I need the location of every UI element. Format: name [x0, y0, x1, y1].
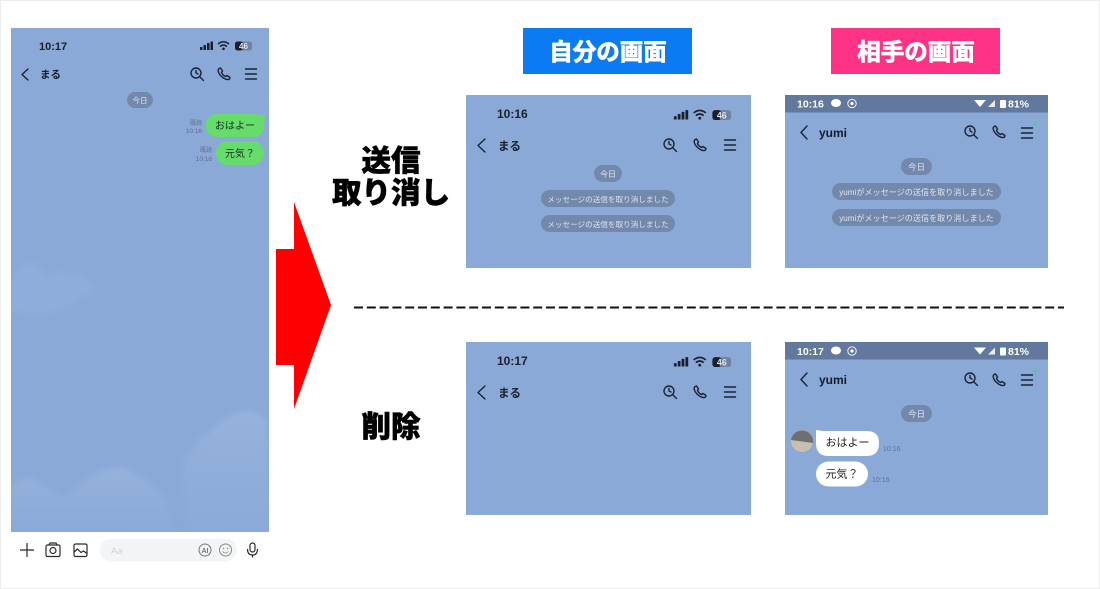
chat header: まる	[498, 140, 521, 153]
panel: my screen, unsend	[466, 95, 751, 268]
icon: microphone	[248, 543, 258, 558]
chat header	[478, 139, 736, 153]
notice: unsent message 2: yumiがメッセージの送信を取り消しました	[839, 213, 994, 223]
panel: original chat screen before action	[11, 28, 269, 532]
sent message: 元気？: 10:16	[196, 156, 212, 163]
status bar	[497, 107, 731, 121]
received message: 元気？	[816, 462, 890, 486]
android status bar: 81%	[1008, 346, 1030, 358]
heading: 自分の画面: 自分の画面	[549, 39, 667, 65]
row label: 送信取り消し: 送信	[361, 145, 421, 178]
input toolbar	[20, 538, 258, 562]
heading: 相手の画面: 相手の画面	[857, 39, 975, 65]
date pill: 今日	[600, 169, 616, 179]
message input field: Aa	[111, 546, 123, 557]
sent message: 元気？: 元気？	[225, 147, 255, 160]
notice: unsent message 2: メッセージの送信を取り消しました	[547, 219, 669, 229]
notice: unsent message 2	[541, 215, 675, 232]
date pill	[127, 92, 153, 108]
date pill	[594, 165, 622, 182]
notice: unsent message 1: yumiがメッセージの送信を取り消しました	[839, 187, 994, 197]
chat header: yumi	[819, 373, 847, 387]
date pill: 今日	[132, 95, 148, 105]
chat header	[801, 122, 1037, 140]
panel: my screen, delete	[466, 342, 751, 515]
sent message: おはよー: おはよー	[215, 120, 255, 132]
row label: 送信取り消し	[332, 145, 450, 210]
chat header	[801, 369, 1037, 387]
arrow: red right arrow	[276, 202, 331, 409]
message input field: AI	[202, 548, 209, 555]
date pill	[901, 158, 932, 175]
message input field	[100, 538, 237, 562]
avatar	[791, 430, 813, 452]
chat header: まる	[498, 387, 521, 400]
android status bar: 10:16	[797, 98, 824, 110]
status bar: 10:16	[497, 107, 528, 121]
received message: おはよー	[816, 430, 901, 456]
chat header	[478, 386, 736, 400]
row label: 送信取り消し: 取り消し	[332, 177, 450, 210]
received message: おはよー: おはよー	[826, 436, 870, 449]
android status bar	[785, 342, 1048, 360]
divider: dashed line	[354, 306, 1064, 308]
heading: 相手の画面	[831, 28, 1000, 74]
sent message: 元気？	[196, 141, 264, 165]
date pill: 今日	[908, 409, 925, 419]
android status bar	[785, 95, 1048, 112]
received message: おはよー: 10:16	[883, 446, 901, 453]
sky clouds background	[18, 412, 266, 488]
icon: plus	[20, 543, 34, 557]
chat header: まる: まる	[40, 69, 61, 81]
status bar	[497, 354, 731, 368]
icon: image	[74, 544, 87, 556]
status bar: 10:17	[497, 354, 528, 368]
notice: unsent message 2	[832, 209, 1001, 226]
status bar	[39, 41, 252, 53]
sent message: おはよー	[186, 114, 266, 137]
chat header: yumi	[819, 126, 847, 140]
notice: unsent message 1	[832, 183, 1001, 200]
status bar: 10:17	[39, 41, 67, 53]
received message: 元気？: 元気？	[826, 466, 858, 480]
android status bar: 10:17	[797, 346, 824, 358]
sent message: おはよー: 10:16	[186, 128, 202, 135]
panel: other party's screen, unsend	[785, 95, 1048, 268]
panel: other party's screen, delete	[785, 342, 1048, 515]
chat header: まる	[22, 68, 256, 81]
received message: 元気？: 10:16	[872, 477, 890, 484]
heading: 自分の画面	[523, 28, 692, 74]
date pill	[901, 405, 932, 422]
notice: unsent message 1: メッセージの送信を取り消しました	[547, 194, 669, 204]
android status bar: 81%	[1008, 98, 1030, 110]
row label: 削除: 削除	[361, 411, 421, 444]
sent message: 元気？: 既読	[200, 146, 212, 154]
sent message: おはよー: 既読	[190, 119, 202, 127]
notice: unsent message 1	[541, 190, 675, 207]
icon: camera	[46, 543, 60, 556]
date pill: 今日	[908, 162, 925, 172]
